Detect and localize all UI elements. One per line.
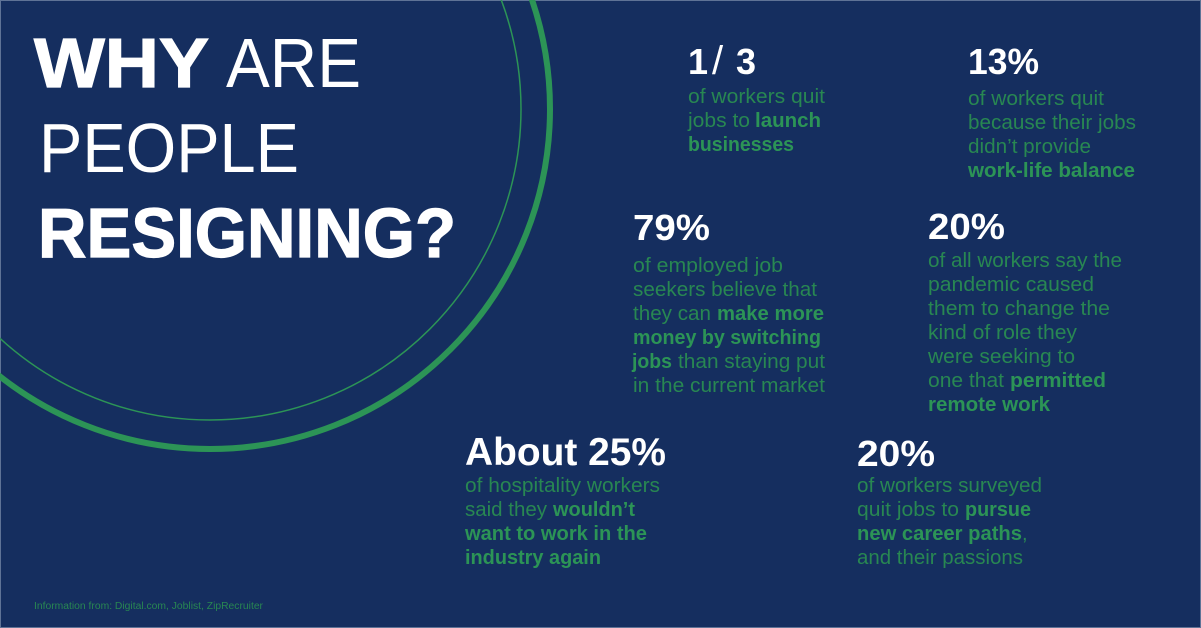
stat: 1/3 launch businesses: of workers quit <box>688 86 825 108</box>
stat: 20% new career paths: 20% <box>857 433 935 474</box>
stat: 79% make more money <box>631 207 825 397</box>
title: WHY <box>34 24 209 102</box>
stat: 1/3 launch businesses: launch <box>755 110 821 132</box>
stat: 1/3 launch businesses: businesses <box>688 134 794 156</box>
title: RESIGNING? <box>38 194 456 272</box>
stat: 13% work-life balance: 13% <box>968 41 1039 82</box>
stat: 13% work-life balance: of workers quit <box>968 88 1104 110</box>
title: ARE <box>226 24 361 102</box>
stat: 20% new career paths: , <box>1022 523 1028 545</box>
stat: 1/3 launch businesses: 1 <box>688 41 708 82</box>
stat: 20% remote work: were seeking to <box>927 346 1075 368</box>
stat: 20% remote work: remote work <box>928 394 1051 416</box>
stat: 79% make more money: make more <box>717 303 824 325</box>
stat: 79% make more money: in the current market <box>633 375 825 397</box>
stat: 20% remote work: permitted <box>1010 370 1106 392</box>
stat: about 25% hospitality: want to work in the <box>464 523 647 545</box>
stat: about 25% hospitality: of hospitality workers <box>465 475 660 497</box>
stat: 20% remote work: 20% <box>928 206 1005 247</box>
stat: 79% make more money: than staying put <box>678 351 825 373</box>
stat: 20% remote work: kind of role they <box>928 322 1077 344</box>
stat: 1/3 launch businesses: / <box>712 39 724 83</box>
stat: 1/3 launch businesses: jobs to <box>687 110 750 132</box>
stat: 13% work-life balance: because their jobs <box>968 112 1136 134</box>
stat: 20% new career paths: and their passions <box>857 547 1023 569</box>
stat: 13% work-life balance: work-life balance <box>967 160 1135 182</box>
stat: about 25% hospitality: About 25% <box>465 431 666 474</box>
stat: 20% remote work: pandemic caused <box>928 274 1094 296</box>
decorative concentric circles <box>0 0 550 449</box>
stat: 79% make more money: jobs <box>631 351 672 373</box>
stat: 79% make more money: 79% <box>633 207 710 248</box>
title: PEOPLE <box>39 109 299 187</box>
stat: 20% remote work <box>927 206 1122 416</box>
stat: 20% remote work: of all workers say the <box>928 250 1122 272</box>
stat: about 25% hospitality: industry again <box>465 547 601 569</box>
source note: Information from: Digital.com, Joblist, ZipRecruiter <box>34 601 264 612</box>
stat: 13% work-life balance <box>967 41 1136 182</box>
stat: 20% new career paths: pursue <box>965 499 1031 521</box>
stat: 79% make more money: seekers believe that <box>633 279 817 301</box>
stat: 79% make more money: they can <box>633 303 711 325</box>
stat: about 25% hospitality: said they <box>465 499 547 521</box>
stat: 79% make more money: money by switching <box>633 327 821 349</box>
stat: 1/3 launch businesses <box>687 39 825 156</box>
stat: 20% remote work: one that <box>928 370 1004 392</box>
stat: 20% new career paths: of workers surveyed <box>857 475 1042 497</box>
stat: 20% remote work: them to change the <box>928 298 1110 320</box>
stat: 13% work-life balance: didn’t provide <box>968 136 1091 158</box>
stat: 79% make more money: of employed job <box>633 255 783 277</box>
title <box>34 24 456 272</box>
stat: 20% new career paths: quit jobs to <box>857 499 959 521</box>
stat: 20% new career paths <box>857 433 1042 569</box>
stat: about 25% hospitality: wouldn’t <box>552 499 635 521</box>
stat: 20% new career paths: new career paths <box>857 523 1022 545</box>
stat: 1/3 launch businesses: 3 <box>736 41 756 82</box>
stat: about 25% hospitality <box>464 431 666 569</box>
